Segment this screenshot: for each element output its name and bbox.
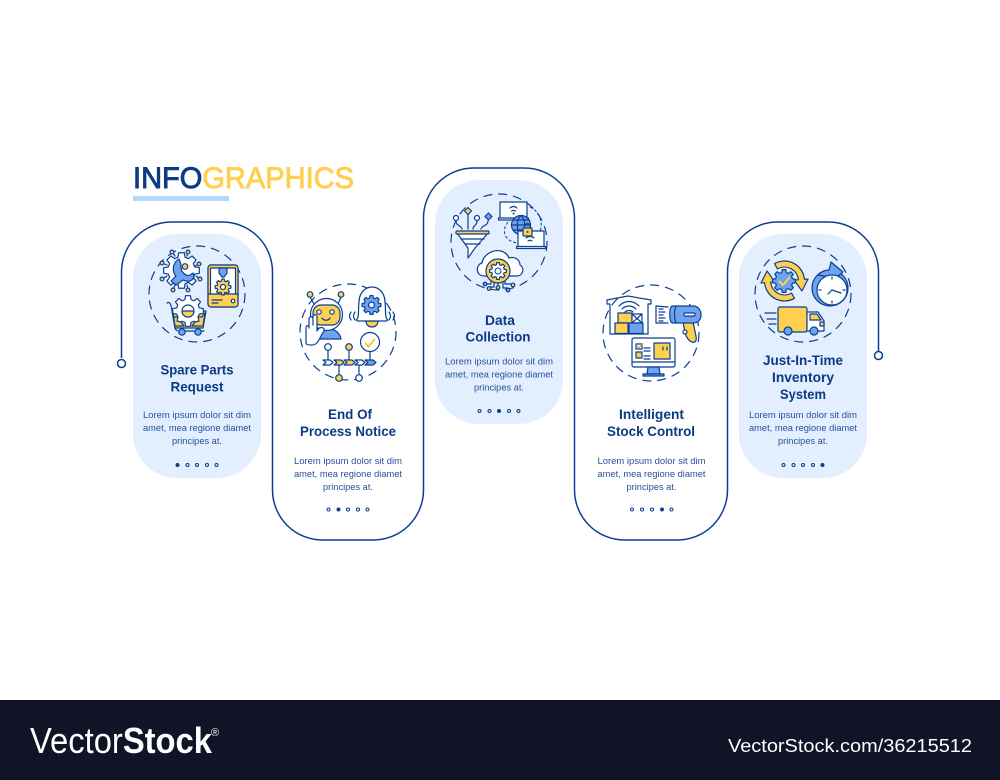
icon: monitor [632, 338, 675, 376]
pagination dots [782, 464, 824, 466]
pagination dots [176, 464, 218, 466]
heading: just-in-time inventory system: Inventory [772, 369, 834, 385]
icon: wrench gear [160, 250, 202, 292]
heading: data collection: Data [485, 312, 515, 328]
text block: Lorem ipsum dolor sit dim [143, 410, 251, 421]
icon: robot [306, 292, 344, 345]
pagination dots [327, 508, 369, 511]
footer band [0, 700, 1000, 780]
icon: just in time [755, 246, 851, 342]
heading: end of process notice: End Of [328, 406, 372, 422]
panel: intelligent stock control [598, 285, 706, 511]
icon: stock control [603, 285, 701, 381]
text block: principes at. [474, 382, 524, 394]
heading: intelligent stock control: Intelligent [619, 406, 684, 422]
text block: amet, mea regione diamet [749, 423, 857, 434]
icon: timeline [323, 344, 376, 381]
text block: amet, mea regione diamet [598, 469, 706, 480]
panel: just-in-time inventory system [749, 246, 857, 466]
text block: Lorem ipsum dolor sit dim [294, 456, 402, 467]
icon: check badge [360, 332, 380, 361]
heading: data collection: Collection [466, 328, 530, 344]
text block: amet, mea regione diamet [143, 423, 251, 434]
text block: amet, mea regione diamet [445, 370, 553, 380]
icon: cloud gear [477, 251, 523, 292]
pagination dots [630, 508, 673, 511]
panel: data collection [445, 194, 553, 412]
icon: end of process [300, 284, 396, 381]
end node [874, 352, 882, 360]
text block: amet, mea regione diamet [294, 469, 402, 480]
icon: barcode scanner [656, 306, 701, 342]
icon: truck [765, 307, 824, 335]
heading: spare parts request: Request [170, 378, 224, 394]
icon: bell [350, 287, 394, 327]
text block: Lorem ipsum dolor sit dim [445, 356, 553, 368]
text block: Lorem ipsum dolor sit dim [749, 410, 857, 421]
pagination dots [478, 410, 520, 412]
panel: end of process notice [294, 284, 402, 511]
start node [118, 360, 126, 368]
heading: just-in-time inventory system: Just-In-Time [763, 352, 843, 368]
heading: intelligent stock control: Stock Control [607, 423, 695, 439]
icon: network laptops [498, 202, 546, 248]
connecting outline [122, 168, 878, 540]
heading: spare parts request: Spare Parts [160, 362, 234, 378]
icon: data collection [451, 194, 547, 292]
heading: end of process notice: Process Notice [300, 423, 396, 439]
text block: principes at. [778, 436, 828, 447]
icon: 3d printer [208, 265, 238, 307]
icon: spare parts [149, 246, 245, 342]
footer logo: VectorStock [30, 720, 213, 761]
icon: clock [812, 262, 848, 306]
heading: just-in-time inventory system: System [780, 386, 826, 402]
panel: spare parts request [143, 246, 251, 466]
text block: principes at. [172, 436, 222, 447]
panel backgrounds [133, 180, 867, 478]
footer id: VectorStock.com/36215512 [728, 736, 972, 756]
title: INFOGRAPHICS [133, 162, 354, 195]
text block: principes at. [323, 482, 373, 493]
icon: cart with gear [167, 296, 206, 335]
icon: cycle arrows [761, 261, 808, 301]
icon: funnel [454, 208, 492, 258]
text block: principes at. [626, 482, 676, 493]
registered mark: ® [211, 727, 219, 739]
text block: Lorem ipsum dolor sit dim [598, 456, 706, 467]
icon: warehouse [607, 296, 651, 334]
